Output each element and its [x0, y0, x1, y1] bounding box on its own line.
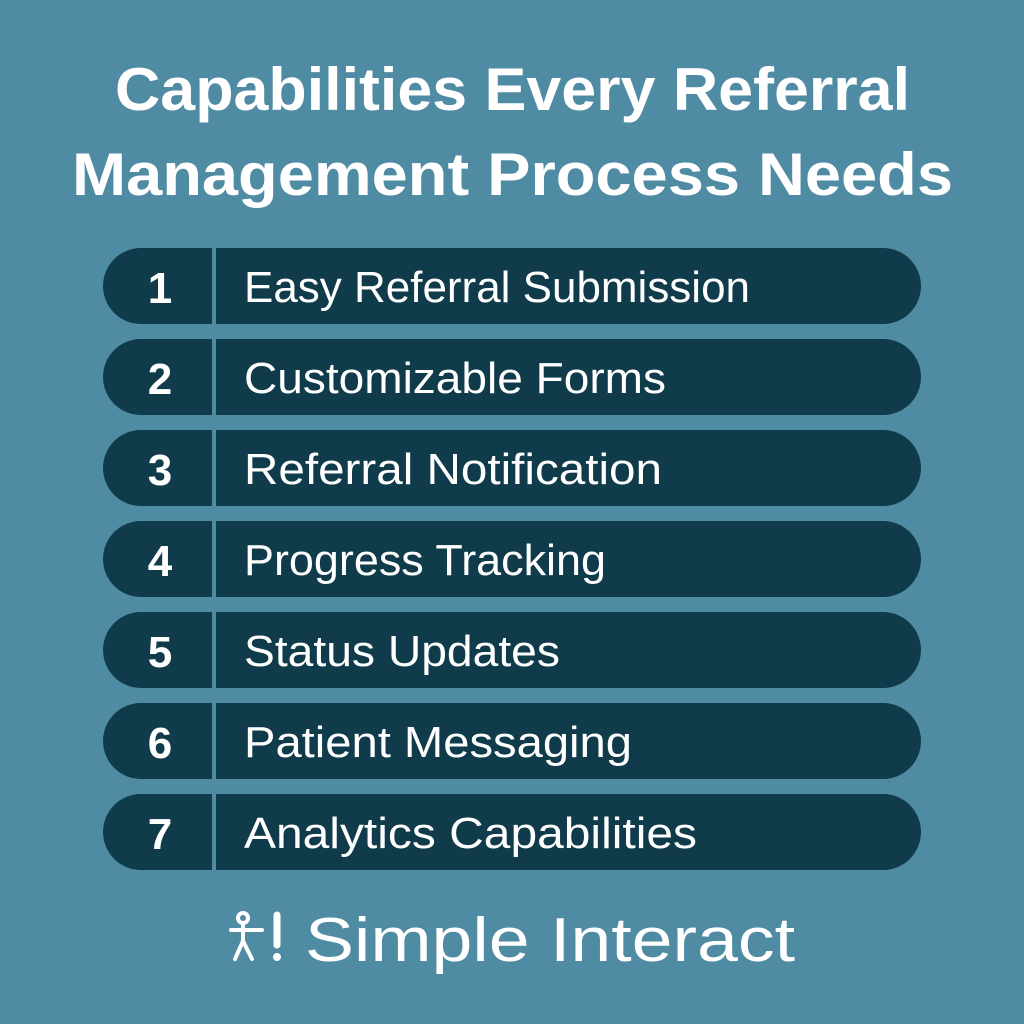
list of capabilities	[103, 248, 921, 870]
item 1: 1	[148, 264, 172, 313]
title: Management Process Needs	[72, 141, 953, 208]
title: Capabilities Every Referral	[115, 56, 910, 123]
item 7	[103, 794, 921, 870]
item 4: 4	[148, 537, 173, 586]
item 6	[103, 703, 921, 779]
item 4	[103, 521, 921, 597]
title	[72, 56, 953, 208]
logo	[231, 906, 795, 975]
item 2: Customizable Forms	[244, 354, 666, 403]
item 3	[103, 430, 921, 506]
item 5: Status Updates	[244, 627, 560, 676]
item 3: 3	[148, 446, 172, 495]
item 2	[103, 339, 921, 415]
item 5	[103, 612, 921, 688]
item 6: 6	[148, 719, 172, 768]
item 5: 5	[148, 628, 172, 677]
item 7: Analytics Capabilities	[244, 809, 697, 858]
icon: person with exclamation	[231, 913, 279, 959]
item 7: 7	[148, 810, 172, 859]
item 1: Easy Referral Submission	[244, 263, 750, 312]
item 1	[103, 248, 921, 324]
item 3: Referral Notification	[244, 445, 662, 494]
item 2: 2	[148, 355, 172, 404]
brand name: Simple Interact	[305, 906, 795, 975]
item 6: Patient Messaging	[244, 718, 632, 767]
item 4: Progress Tracking	[244, 536, 606, 585]
